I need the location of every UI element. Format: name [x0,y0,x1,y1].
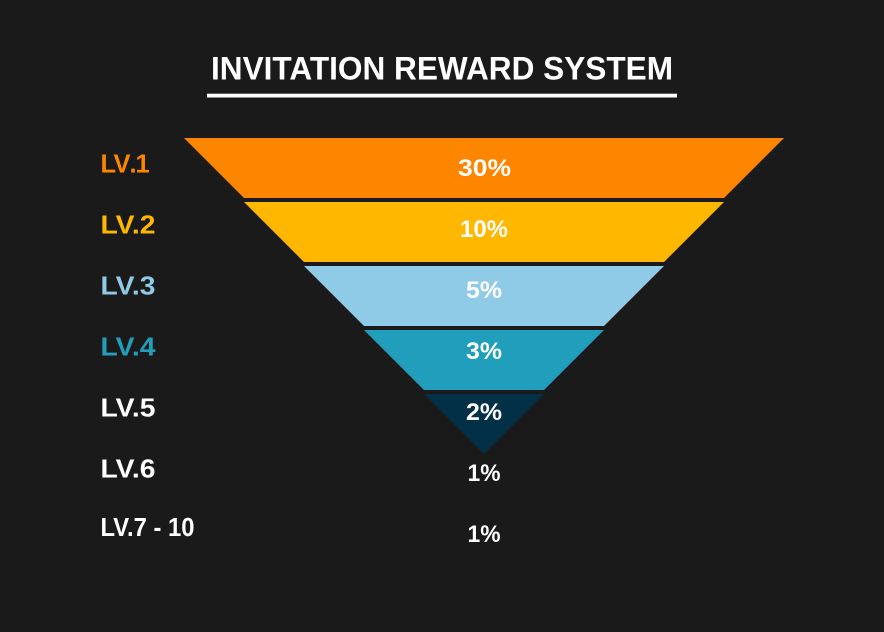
funnel tier 3 [304,266,664,326]
funnel chart [184,138,784,454]
funnel tier 2 [244,202,724,262]
level labels [100,150,194,542]
value 30%: 30% [458,155,511,182]
label LV.5: LV.5 [100,394,156,422]
label LV.1: LV.1 [100,150,150,178]
label LV.4: LV.4 [100,334,156,362]
funnel tier 5 [424,394,544,454]
value 2%: 2% [466,399,502,426]
funnel tier 1 [184,138,784,198]
value 5%: 5% [466,277,502,304]
label LV.2: LV.2 [100,212,156,240]
title underline [207,94,677,98]
title: INVITATION REWARD SYSTEM [211,50,673,86]
label LV.6: LV.6 [100,456,156,484]
value 1% levels 7-10: 1% [468,521,500,548]
value 3%: 3% [466,338,502,365]
label LV.7 - 10: LV.7 - 10 [100,514,194,542]
label LV.3: LV.3 [100,272,156,300]
percentage values [458,155,511,548]
value 10%: 10% [460,216,508,243]
value 1% level 6: 1% [468,460,500,487]
funnel tier 4 [364,330,604,390]
